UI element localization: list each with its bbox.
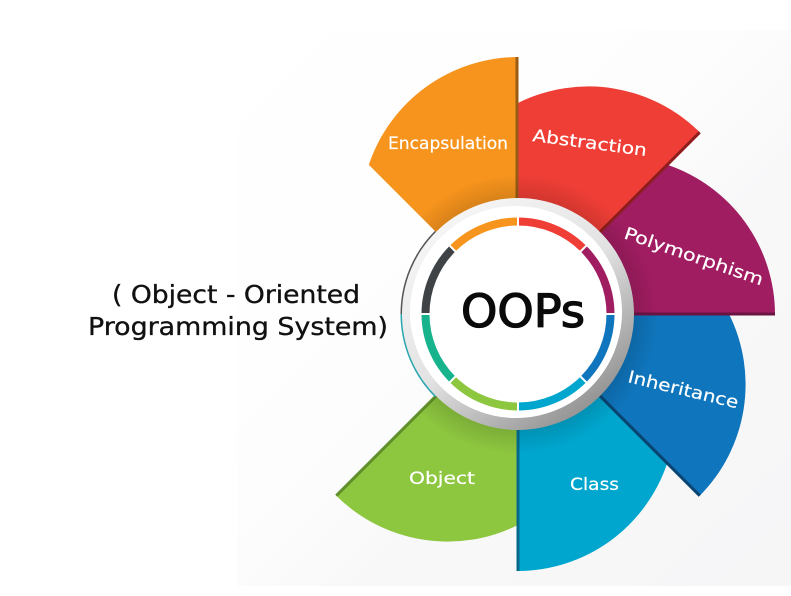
central disc — [402, 198, 634, 430]
label: Encapsulation: Encapsulation — [388, 134, 508, 154]
panel: Inheritance wedge — [599, 316, 746, 497]
panel: Encapsulation wedge — [368, 57, 518, 232]
segmented colour ring — [419, 215, 617, 413]
subtitle: Object-Oriented Programming System: Programming System) — [88, 312, 388, 341]
subtitle: Object-Oriented Programming System: ( Object - Oriented — [112, 280, 360, 309]
subtitle: Object-Oriented Programming System — [88, 280, 388, 341]
panel: Class wedge — [516, 397, 667, 571]
label: Class: Class — [570, 475, 619, 495]
panel: Polymorphism wedge — [601, 165, 775, 316]
label: Inheritance: Inheritance — [626, 367, 740, 413]
background panel — [237, 30, 791, 586]
panel: Abstraction wedge — [518, 86, 701, 233]
label: Abstraction: Abstraction — [531, 126, 648, 161]
center title: OOPs: OOPs — [461, 285, 585, 338]
label: Polymorphism: Polymorphism — [621, 224, 766, 290]
label: Object: Object — [409, 469, 475, 489]
panel: Object wedge — [335, 396, 516, 542]
